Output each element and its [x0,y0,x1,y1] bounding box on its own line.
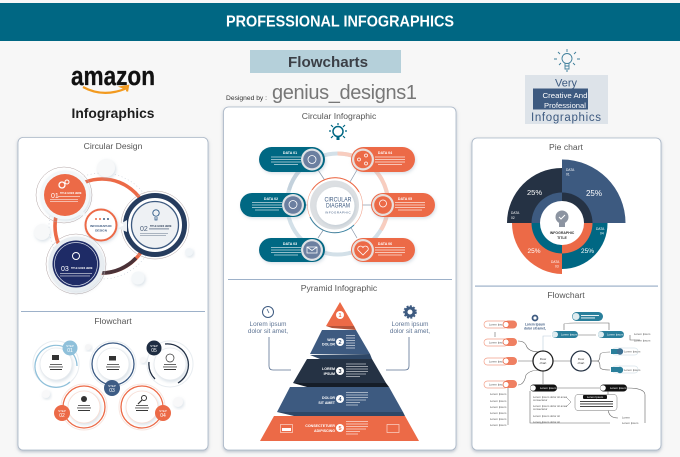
pill: data 05: DATA 05 [398,197,412,201]
chart: pie: DATA [551,260,560,264]
tier 3 [293,359,386,383]
lower text list: consectetur [533,407,548,411]
step 05: 05 [151,348,157,354]
tier 4 [277,387,403,412]
red node 3 [484,357,517,365]
right pyramid note [390,306,430,335]
pill: data 06: DATA 06 [378,242,392,246]
chart: pie [507,160,626,274]
red node 1 [484,320,517,328]
very creative badge: Creative And [542,91,588,100]
right pyramid note: dolor sit amet, [390,328,430,335]
icon: top right lightbulb [554,49,580,71]
list under node 4: Lorem Ipsum [490,423,507,427]
icon: amazon smile arrow [83,86,128,93]
lower note box [566,394,617,410]
teal pill right: Lorem Ipsum [607,332,624,336]
pill: data 05 [371,193,435,217]
pill: data 03: DATA 03 [283,242,297,246]
panel: centre [224,107,456,450]
teal pill left: Lorem Ipsum [561,332,578,336]
lower text list: Lorem Ipsum dolor sit amet [533,404,567,408]
chart: pie: 25% [527,188,542,197]
chart: circular diagram [240,147,435,262]
panel: right [472,138,661,450]
centre hub: CIRCULAR [324,198,352,204]
red node 4: Lorem Ipsum [489,382,506,386]
flow node 2: Flow [578,357,585,361]
heading: left flowchart: Flowchart [94,316,132,326]
teal pill right [598,331,624,338]
chart: pie: 25% [581,248,594,255]
lower text list: Lorem Ipsum dolor sit [533,414,560,418]
chart: pyramid [260,302,419,441]
pill: data 01: DATA 01 [283,151,297,155]
step 03 badge [104,380,120,396]
tier 3: 3 [338,369,342,375]
tier 2: DOLOR [322,342,335,346]
panel: left [18,138,208,450]
tier 2 [310,330,370,354]
icon: teal bulb [329,123,347,140]
circle 03: 03 [61,266,69,273]
right branch labels [634,332,651,342]
left pyramid note: Lorem ipsum [250,321,286,328]
tier 5 [260,416,419,441]
list under node 4: Lorem Ipsum [490,405,507,409]
heading: pyramid infographic: Pyramid Infographic [301,283,378,293]
list under node 4: Lorem Ipsum [490,417,507,421]
flowcharts heading [250,50,401,73]
heading: circular design: Circular Design [84,141,143,151]
tier 4: DOLOR [322,396,335,400]
circle 03: TITLE GOES HERE [71,267,93,270]
tier 2: WISI [327,338,335,342]
arrow: left connector [269,337,291,370]
lower note box: Lorem Ipsum [587,395,604,399]
step 04 [119,384,171,430]
tier 5: 5 [338,426,342,432]
pill: data 02: DATA 02 [264,197,278,201]
title: PROFESSIONAL INFOGRAPHICS [226,14,454,30]
blue node bottom [611,366,641,373]
step 03 badge: 03 [109,388,115,394]
blue node bottom: Lorem Ipsum [624,368,641,372]
step 05: STEP [150,344,158,348]
tier 4: 4 [338,397,342,403]
step 01: 01 [67,348,73,354]
step 03 [54,384,107,430]
lower text list: Lorem Ipsum dolor sit amet [533,395,567,399]
chart: pie: 25% [527,248,541,255]
red node 3: Lorem Ipsum [489,360,506,364]
gear note: Lorem Ipsum [525,322,545,326]
tier 5: CONSECTETUER [305,424,335,428]
tier 5: ADIPISCING [314,429,335,433]
flow node 1: chart [540,361,546,365]
circle 03 [46,234,106,294]
lower text list: Lorem Ipsum dolor sit [533,420,560,424]
pill: data 04: DATA 04 [378,151,392,155]
circle 01: TITLE GOES HERE [60,192,82,195]
amazon logo: amazon [71,61,155,91]
tier 1: 1 [338,313,342,319]
flow node 2 [571,351,591,371]
chart: circular design [34,159,193,294]
step 03 badge: STEP [108,384,116,388]
chart: pie: DATA [511,211,520,215]
heading: right flowchart: Flowchart [547,290,585,300]
chart: pie: 01 [566,172,570,176]
arrow: right connector [386,337,409,370]
chart: pie: 25% [586,189,602,198]
heading: circular infographic: Circular Infographic [302,111,377,121]
header banner [0,3,680,41]
centre hub [308,178,362,233]
circle centre: INFOGRAPHIC [90,224,113,228]
right branch labels: Lorem Ipsum [634,332,651,336]
flow node 2: chart [578,361,584,365]
centre hub: INFOGRAPHIC [325,210,351,214]
left heading: Infographics [72,105,155,121]
circle centre: DESIGN [95,228,108,232]
black pill right: Lorem Ipsum [610,386,627,390]
tier 2: 2 [338,340,342,346]
teal pill left [552,331,578,338]
very creative badge: Professional [544,101,586,110]
flow node 1 [533,351,553,371]
chart: pie: DATA [566,168,575,172]
right branch labels: Lorem Ipsum [634,338,651,342]
teal top pill [572,312,603,321]
right pyramid note: Lorem ipsum [392,321,428,328]
tier 3: LOREM [322,367,335,371]
pill: data 03 [259,238,325,262]
chart: pie: INFOGRAPHIC [550,231,575,235]
pill: data 02 [240,193,306,217]
blue node top: Lorem Ipsum [624,350,641,354]
pill: data 04 [351,147,415,172]
centre hub: DIAGRAM [326,204,350,210]
step 05 [146,340,193,387]
chart: pie: 04 [600,232,604,236]
list under node 4: Lorem Ipsum [490,392,507,396]
chart: pie: DATA [596,227,605,231]
designer credit: genius_designs1 [272,82,417,104]
chart: pie: 02 [511,216,515,220]
gear note: dolor sit amet, [524,326,546,330]
tier 4: SIT AMET [318,401,336,405]
flowcharts heading: Flowcharts [288,54,368,71]
chart: right flowchart [484,312,651,427]
black pill left: Lorem Ipsum [540,386,557,390]
lower text list: Lorem [622,416,631,420]
red node 4 [484,380,517,388]
tier 1 [326,302,354,326]
chart: pie: TITLE [557,236,568,240]
step 03: 02 [59,413,65,419]
flow node 1: Flow [540,357,547,361]
left pyramid note: dolor sit amet, [248,328,288,335]
chart: pie: 03 [555,264,559,268]
heading: pie chart: Pie chart [549,142,584,152]
step 02 circle top [90,341,136,387]
very creative badge: Very [555,78,578,90]
circle 02: TITLE GOES HERE [150,225,172,228]
pill: data 06 [351,238,415,262]
step 01: STEP [66,344,74,348]
list under node 4: Lorem Ipsum [490,411,507,415]
pill: data 01 [259,147,325,172]
red node 2 [484,338,517,346]
lower text list [533,395,639,425]
circle centre [86,210,124,240]
pie centre bulb [556,210,568,227]
red node 2: Lorem Ipsum [489,340,506,344]
black pill right [600,384,627,392]
left pyramid note [248,306,288,335]
step 03: STEP [58,409,66,413]
red node 1: Lorem Ipsum [489,322,506,326]
step 04: 04 [160,413,166,419]
circle 02 [115,191,189,259]
chart: step flowchart [33,340,193,430]
list under node 4: Lorem Ipsum [490,399,507,403]
circle 02: 02 [140,226,148,233]
circle 01: 01 [51,193,59,200]
lower text list: Lorem Ipsum [622,421,639,425]
very creative badge [525,75,608,124]
very creative badge: Infographics [531,112,601,124]
blue node top [611,348,641,355]
black pill left [530,384,557,392]
designer credit: Designed by : [226,95,267,102]
tier 3: IPSUM [324,372,335,376]
step 01 [33,340,79,387]
step 04: STEP [159,409,167,413]
circle 01 [36,167,92,223]
list under node 4 [490,388,508,427]
gear note [524,316,546,330]
lower text list: consectetur [533,398,548,402]
